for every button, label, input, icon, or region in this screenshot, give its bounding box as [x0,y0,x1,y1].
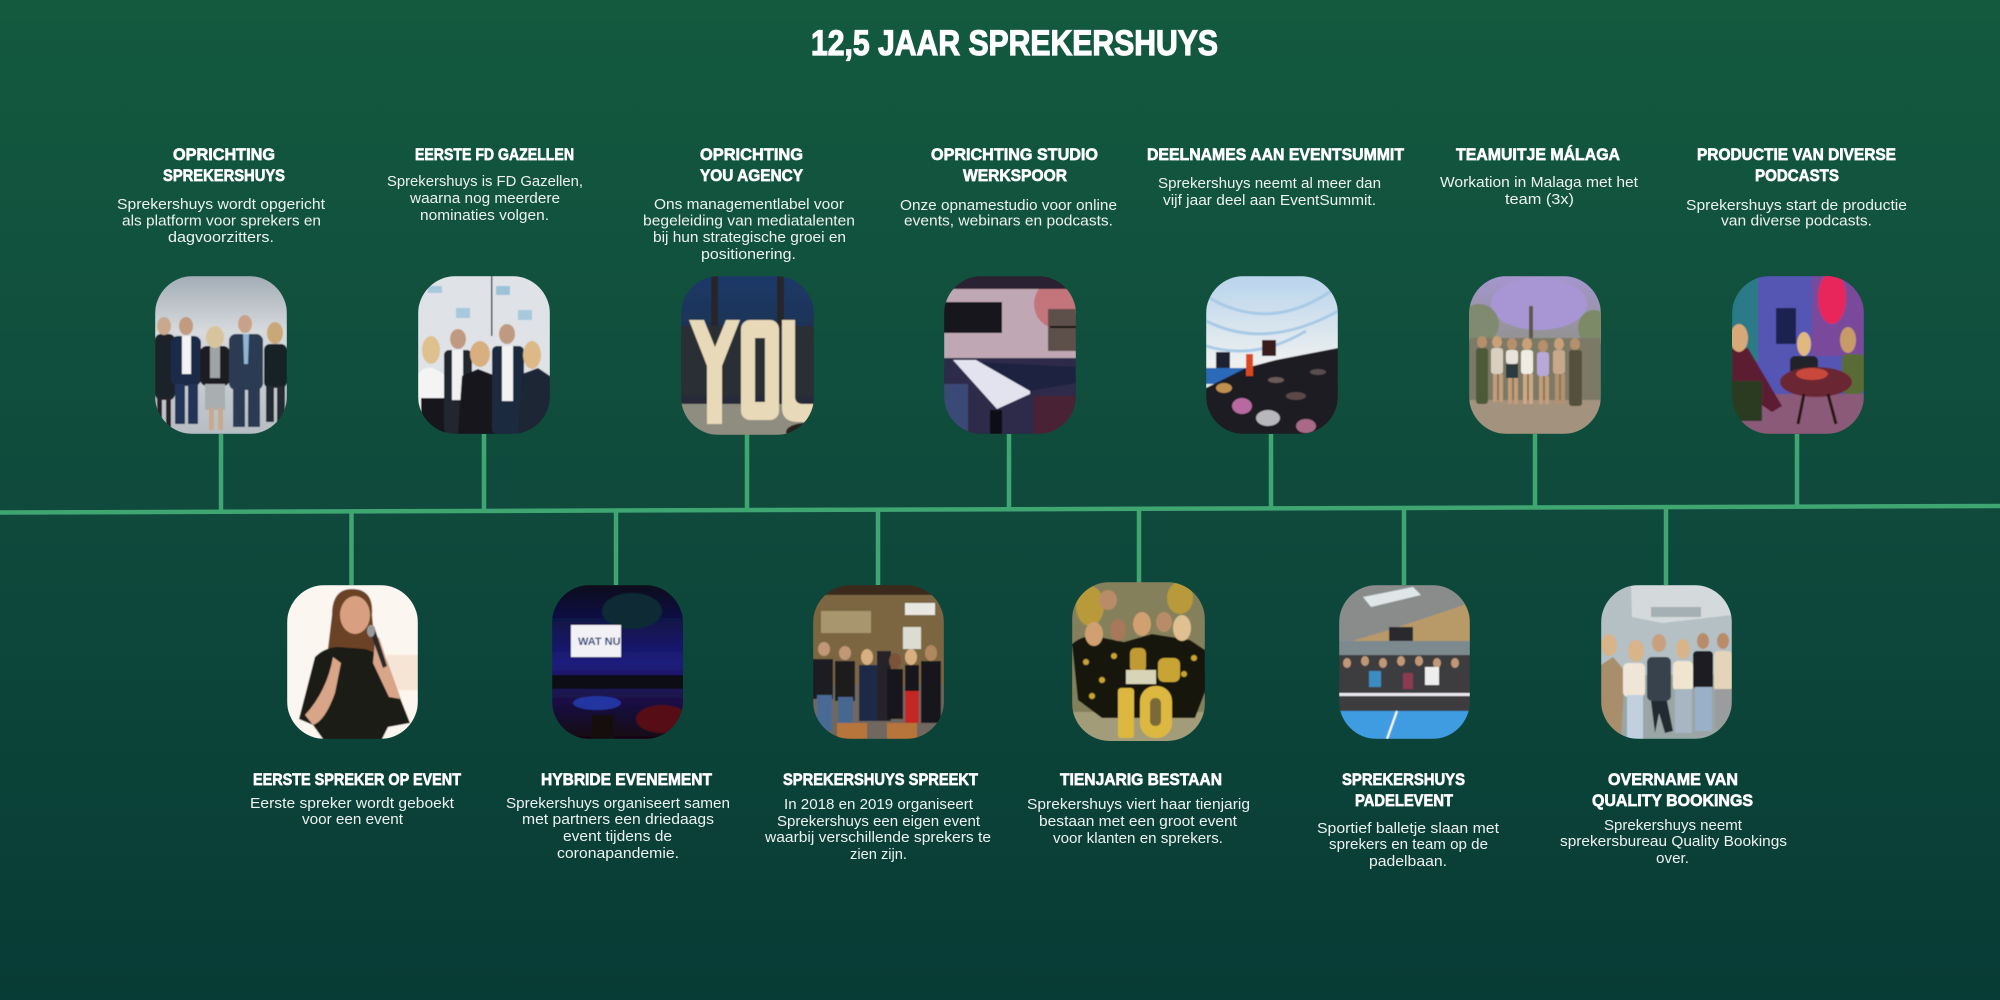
description: dagvoorzitters. [168,229,274,246]
photo: YOU light letters [681,276,814,435]
milestone: overname quality bookings [1560,585,1787,867]
description: over. [1656,850,1689,867]
heading: QUALITY BOOKINGS [1592,792,1753,810]
description [1560,817,1787,867]
milestone: oprichting sprekershuys [117,146,326,434]
description: bestaan met een groot event [1039,813,1238,830]
heading [1697,146,1896,185]
description: zien zijn. [850,846,907,863]
description [1686,197,1907,230]
milestone: hybride evenement [506,585,730,862]
description: Sprekershuys wordt opgericht [117,196,326,213]
milestone: productie podcasts [1686,146,1907,434]
photo: podcast set [1730,272,1864,434]
description: Sportief balletje slaan met [1317,820,1500,837]
description [1317,820,1500,870]
description: vijf jaar deel aan EventSummit. [1163,192,1376,209]
description: team (3x) [1505,191,1574,208]
heading [163,146,285,185]
title: 12,5 JAAR SPREKERSHUYS [811,24,1218,63]
description: nominaties volgen. [420,207,549,224]
milestone: oprichting you agency [643,146,855,441]
description: bij hun strategische groei en [653,229,846,246]
heading: PADELEVENT [1355,792,1453,810]
milestone: tienjarig bestaan [1027,582,1250,847]
milestone: deelnames aan eventsummit [1147,146,1404,434]
heading: OPRICHTING [700,146,803,164]
heading: OVERNAME VAN [1608,771,1738,789]
heading: PODCASTS [1755,167,1839,185]
photo: padel court group [1339,585,1470,739]
description: sprekers en team op de [1329,836,1488,853]
heading: SPREKERSHUYS [1342,771,1465,789]
description [643,196,855,263]
heading: YOU AGENCY [700,167,803,185]
heading: TIENJARIG BESTAAN [1060,771,1222,789]
heading: SPREKERSHUYS [163,167,285,185]
description: met partners een driedaags [522,811,714,828]
description [1158,175,1381,209]
description: voor klanten en sprekers. [1053,830,1223,847]
milestone: teamuitje malaga [1440,145,1639,434]
heading [1342,771,1465,810]
description: Sprekershuys een eigen event [777,813,981,830]
heading: HYBRIDE EVENEMENT [541,771,712,789]
description: Sprekershuys start de productie [1686,197,1907,214]
description: positionering. [701,246,796,263]
description: Onze opnamestudio voor online [900,197,1117,214]
description [117,196,326,246]
description: van diverse podcasts. [1721,213,1872,230]
photo: hybrid stage [552,585,688,739]
description: waarbij verschillende sprekers te [764,829,991,846]
heading: SPREKERSHUYS SPREEKT [783,771,978,789]
photo: team under jacaranda [1469,276,1601,434]
description [506,795,730,862]
description [1027,796,1250,847]
photo: office group [1601,585,1732,739]
milestone: sprekershuys padelevent [1317,585,1500,870]
description: Sprekershuys neemt al meer dan [1158,175,1381,192]
photo: speaker with microphone [287,585,418,739]
milestone: sprekershuys spreekt [764,585,991,863]
description [764,796,991,863]
description: Sprekershuys neemt [1604,817,1743,834]
heading: EERSTE SPREKER OP EVENT [253,771,461,789]
description: Ons managementlabel voor [654,196,844,213]
heading [1592,771,1753,810]
photo: team of five [155,276,287,434]
description: sprekersbureau Quality Bookings [1560,833,1787,850]
photo: golden 10 balloons [1072,582,1205,742]
description [250,795,455,828]
heading: EERSTE FD GAZELLEN [415,146,574,164]
description: als platform voor sprekers en [122,212,321,230]
heading: OPRICHTING [173,146,275,164]
description [900,197,1117,230]
description: event tijdens de [563,828,672,845]
photo: event dome [1206,276,1338,434]
milestone: oprichting studio werkspoor [900,146,1117,434]
photo: award group [418,276,550,434]
description: padelbaan. [1369,853,1447,870]
milestone: eerste FD gazellen [387,146,583,434]
description: Eerste spreker wordt geboekt [250,795,455,812]
heading: TEAMUITJE MÁLAGA [1456,145,1620,164]
heading: PRODUCTIE VAN DIVERSE [1697,146,1896,164]
heading: WERKSPOOR [963,167,1067,185]
description: coronapandemie. [557,845,679,862]
timeline [0,434,2000,585]
heading: DEELNAMES AAN EVENTSUMMIT [1147,146,1404,164]
description: Sprekershuys is FD Gazellen, [387,173,583,190]
description [1440,174,1639,208]
heading [931,146,1098,185]
photo: hybrid stage: WAT NU [578,636,621,648]
heading: OPRICHTING STUDIO [931,146,1098,164]
description [387,173,583,224]
description: Sprekershuys viert haar tienjarig [1027,796,1250,813]
heading [700,146,803,185]
photo: recording studio [944,276,1078,434]
description: voor een event [302,811,404,828]
description: begeleiding van mediatalenten [643,212,855,230]
description: Sprekershuys organiseert samen [506,795,730,812]
photo: group in industrial hall [813,585,944,739]
description: waarna nog meerdere [409,190,560,207]
description: In 2018 en 2019 organiseert [784,796,974,813]
milestone: eerste spreker op event [250,585,461,828]
description: Workation in Malaga met het [1440,174,1639,191]
description: events, webinars en podcasts. [904,213,1113,230]
